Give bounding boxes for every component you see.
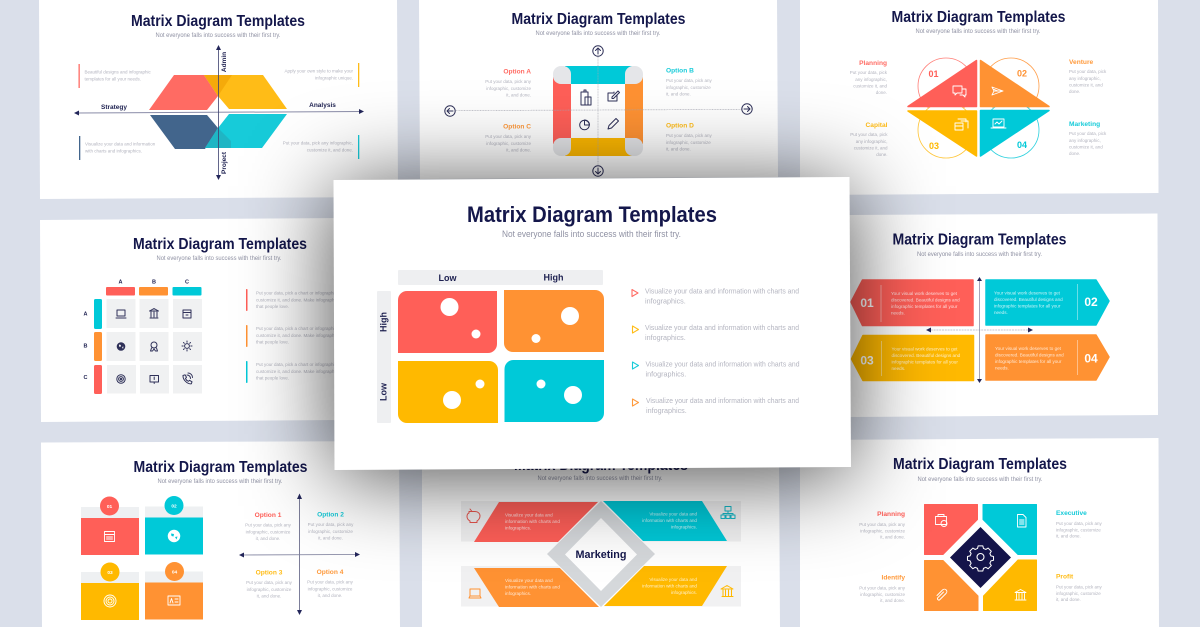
side callouts: customize it, and done. Make infographics <box>256 298 341 302</box>
tag text <box>891 290 1064 371</box>
bullet list: infographics. <box>646 406 687 415</box>
callouts: customize it, and done. <box>307 148 353 152</box>
panel: numbered folder cards <box>41 441 400 627</box>
option labels: Put your data, pick any <box>485 134 532 139</box>
option texts: infographic, customize <box>308 586 353 592</box>
bullet list: infographics. <box>645 296 686 306</box>
option labels: Put your data, pick any <box>666 78 713 83</box>
tag text: Your visual work deserves to get <box>892 346 958 352</box>
side callouts: customize it, and done. Make infographics <box>256 333 341 338</box>
heading: Matrix Diagram Templates <box>467 202 717 227</box>
labels: done. <box>1069 151 1080 156</box>
callouts: Beautiful designs and infographic <box>84 70 152 74</box>
labels: customize it, and <box>854 146 888 150</box>
axis labels: Project <box>221 151 228 174</box>
labels: infographic, customize <box>1056 591 1101 596</box>
side callouts: that people love. <box>256 376 289 380</box>
tag dividers <box>881 284 1078 376</box>
grid cells <box>106 299 202 394</box>
square frame <box>553 66 643 156</box>
folder cards: 01 <box>107 504 112 510</box>
heading: Matrix Diagram Templates <box>514 457 688 474</box>
arrow tags <box>851 280 1109 380</box>
bullet list: Visualize your data and information with charts and <box>645 286 799 296</box>
side callouts <box>246 289 341 383</box>
labels: Planning <box>859 60 887 67</box>
option labels: it, and done. <box>506 92 531 98</box>
labels: Executive <box>1056 510 1087 517</box>
tag numbers: 03 <box>860 354 874 368</box>
option texts <box>245 512 354 598</box>
heading: Matrix Diagram Templates <box>512 11 686 28</box>
subtitle: Not everyone falls into success with their first try. <box>502 229 681 239</box>
labels: Put your data, pick any <box>859 522 906 527</box>
labels <box>859 510 1103 603</box>
tag text: needs. <box>994 310 1008 315</box>
labels: any infographic, <box>1069 138 1101 143</box>
labels: done. <box>876 152 888 157</box>
grid labels: A <box>84 312 88 318</box>
axes with arrows <box>74 45 364 180</box>
option labels <box>485 68 713 152</box>
subtitle: Not everyone falls into success with their first try. <box>536 30 661 37</box>
tag text: discovered. Beautiful designs and <box>892 353 961 358</box>
cross arrows <box>926 277 1033 383</box>
labels: any infographic, <box>855 77 887 82</box>
option labels: Put your data, pick any <box>666 133 713 138</box>
labels: Marketing <box>1069 121 1100 128</box>
option texts: Put your data, pick any <box>308 522 354 527</box>
option labels: Option D <box>666 122 694 130</box>
side callouts: that people love. <box>256 304 289 309</box>
option texts: Option 2 <box>317 512 344 518</box>
folder cards: 04 <box>172 569 177 575</box>
grid labels: C <box>185 280 189 286</box>
callouts: with charts and infographics. <box>85 148 142 154</box>
heading: Matrix Diagram Templates <box>892 232 1066 248</box>
tag numbers: 04 <box>1084 352 1098 366</box>
option texts: it, and done. <box>256 536 280 541</box>
bullet list: Visualize your data and information with charts and <box>646 360 800 368</box>
labels: done. <box>876 90 887 95</box>
numbers: 04 <box>1017 140 1027 150</box>
callouts: infographic unique. <box>315 76 353 80</box>
band text: Visualize your data and <box>505 578 553 583</box>
numbers: 03 <box>929 141 939 151</box>
tag text: Your visual work deserves to get <box>891 291 958 296</box>
band text <box>505 512 697 596</box>
subtitle: Not everyone falls into success with their first try. <box>158 478 283 485</box>
tag text: needs. <box>995 366 1009 370</box>
option texts: Option 4 <box>317 569 344 576</box>
labels: Put your data, pick <box>850 70 888 75</box>
heading: Matrix Diagram Templates <box>134 459 308 476</box>
labels: Put your data, pick any <box>1056 521 1103 526</box>
labels: Identify <box>882 574 905 582</box>
bullet list: infographics. <box>646 370 686 378</box>
row header: Low <box>378 382 388 401</box>
folder cards <box>81 496 203 620</box>
labels: Planning <box>877 511 905 518</box>
option labels: Option B <box>666 68 694 74</box>
panel: three by three icon grid <box>40 218 342 422</box>
grey bands <box>461 501 741 606</box>
panel: options square matrix <box>419 0 778 179</box>
axis labels: Analysis <box>309 102 336 109</box>
diamond <box>546 499 656 609</box>
labels: customize it, and <box>1069 82 1103 88</box>
panel: strategy analysis hexagon matrix <box>39 0 398 199</box>
tag text: discovered. Beautiful designs and <box>994 297 1063 302</box>
parallelograms <box>474 501 727 607</box>
labels: done. <box>1069 89 1080 94</box>
callouts: Visualize your data and information <box>85 142 156 146</box>
option texts: Option 1 <box>255 512 282 519</box>
header and row bars <box>94 287 202 394</box>
tag text: Your visual work deserves to get <box>995 346 1062 351</box>
labels: Put your data, pick <box>1069 131 1107 136</box>
subtitle: Not everyone falls into success with their first try. <box>156 255 282 262</box>
subtitle: Not everyone falls into success with their first try. <box>538 475 663 482</box>
option texts: Put your data, pick any <box>307 580 354 584</box>
option labels: it, and done. <box>666 146 691 152</box>
band text: infographics. <box>505 591 531 596</box>
tag numbers <box>860 295 1098 368</box>
axis labels: Strategy <box>101 104 127 111</box>
quadrant icons <box>936 514 1026 600</box>
tag text: discovered. Beautiful designs and <box>891 298 960 302</box>
band text: information with charts and <box>505 519 560 524</box>
option labels: infographic, customize <box>486 86 531 91</box>
callouts <box>78 63 359 160</box>
labels: it, and done. <box>1056 534 1081 538</box>
labels: Profit <box>1056 574 1074 580</box>
band text: Visualize your data and <box>505 512 553 518</box>
labels: infographic, customize <box>1056 528 1101 532</box>
bullet list: Visualize your data and information with charts and <box>646 396 799 405</box>
column header <box>398 270 603 285</box>
labels <box>850 59 1107 157</box>
grid icons <box>116 308 192 384</box>
column header: High <box>544 272 564 282</box>
bullet list: infographics. <box>645 333 686 342</box>
diamond: Marketing <box>576 549 626 561</box>
arrow buttons <box>445 46 752 176</box>
option texts: it, and done. <box>318 593 342 598</box>
quadrant: low low <box>398 361 498 423</box>
subtitle: Not everyone falls into success with their first try. <box>918 476 1043 483</box>
grid labels: C <box>84 375 88 381</box>
option labels: it, and done. <box>506 148 531 152</box>
folder cards: 02 <box>171 503 177 509</box>
option labels: it, and done. <box>666 92 691 96</box>
band icons <box>467 506 735 598</box>
option texts: it, and done. <box>257 594 281 598</box>
panel: triangle petals matrix <box>800 0 1158 195</box>
labels: any infographic, <box>1069 76 1101 81</box>
dotted axes <box>456 57 742 165</box>
cross arrows <box>239 494 360 615</box>
tag text: discovered. Beautiful designs and <box>995 352 1064 358</box>
option labels: Option C <box>503 124 531 130</box>
row header: High <box>378 312 388 332</box>
gear icon <box>967 546 994 571</box>
tag numbers: 01 <box>860 296 874 310</box>
tag text: Your visual work deserves to get <box>994 290 1061 296</box>
panel: marketing diamond <box>422 457 780 627</box>
grid labels: B <box>152 280 156 286</box>
row header <box>377 291 391 423</box>
quadrants <box>924 504 1036 610</box>
option labels: infographic, customize <box>666 85 711 90</box>
labels: it, and done. <box>1056 597 1081 602</box>
heading: Matrix Diagram Templates <box>893 456 1067 473</box>
petal circles <box>918 58 1039 158</box>
tag text: needs. <box>891 310 905 316</box>
option labels: infographic, customize <box>666 140 711 145</box>
quadrant: high high <box>504 290 604 352</box>
band text: infographics. <box>671 524 697 530</box>
grid labels <box>84 280 189 381</box>
numbers: 01 <box>928 69 939 79</box>
axis labels: Admin <box>221 52 228 72</box>
icons <box>953 86 1006 130</box>
heading: Matrix Diagram Templates <box>892 9 1066 26</box>
heading: Matrix Diagram Templates <box>131 13 305 30</box>
tag text: needs. <box>892 366 905 371</box>
callouts: templates for all your needs. <box>84 76 141 82</box>
option texts: Put your data, pick any <box>246 580 293 585</box>
grid labels: A <box>119 280 123 286</box>
option texts: infographic, customize <box>246 530 291 534</box>
centre diamond <box>950 527 1011 588</box>
labels: infographic, customize <box>860 528 905 534</box>
callouts: Apply your own style to make your <box>284 68 354 74</box>
subtitle: Not everyone falls into success with their first try. <box>156 32 281 39</box>
panel: gear diamond quadrants <box>800 438 1159 627</box>
band text: information with charts and <box>642 518 697 523</box>
panel: central low high matrix <box>334 177 851 470</box>
band text: infographics. <box>671 590 697 595</box>
callouts: Put your data, pick any infographic, <box>283 140 353 146</box>
tag text: infographic templates for all your <box>892 360 958 364</box>
tag text: infographic templates for all your <box>994 304 1061 308</box>
triangles <box>908 60 1049 156</box>
band text: information with charts and <box>642 584 697 588</box>
folder cards: 03 <box>107 570 113 576</box>
labels: it, and done. <box>880 534 905 540</box>
labels: customize it, and <box>853 84 887 88</box>
tag text: infographic templates for all your <box>891 304 958 309</box>
labels: any infographic, <box>856 139 888 144</box>
side callouts: Put your data, pick a chart or infographic, <box>256 362 338 367</box>
labels: it, and done. <box>880 598 905 603</box>
subtitle: Not everyone falls into success with their first try. <box>916 28 1041 35</box>
panel: arrow tags matrix <box>848 214 1158 417</box>
icons <box>580 90 620 130</box>
column header: Low <box>438 273 457 283</box>
labels: Put your data, pick any <box>859 586 906 590</box>
labels: infographic, customize <box>860 592 905 597</box>
labels: Put your data, pick any <box>1056 584 1103 590</box>
band text: infographics. <box>505 526 531 530</box>
bullet list: Visualize your data and information with charts and <box>645 323 799 332</box>
subtitle: Not everyone falls into success with their first try. <box>917 251 1042 258</box>
option texts: infographic, customize <box>308 529 353 534</box>
labels: Put your data, pick <box>850 132 888 137</box>
option texts: it, and done. <box>318 536 343 540</box>
side callouts: Put your data, pick a chart or infographic, <box>256 326 338 331</box>
tag numbers: 02 <box>1084 295 1098 309</box>
side callouts: that people love. <box>256 340 289 344</box>
labels: Put your data, pick <box>1069 69 1107 74</box>
quadrant: high low <box>398 291 497 353</box>
band text: Visualize your data and <box>649 512 697 516</box>
grid labels: B <box>84 344 88 350</box>
option texts: Put your data, pick any <box>245 522 292 528</box>
option labels: Option A <box>503 68 531 76</box>
heading: Matrix Diagram Templates <box>133 236 307 253</box>
option texts: infographic, customize <box>247 587 292 592</box>
quadrant: low high <box>504 360 604 422</box>
band text: information with charts and <box>505 584 560 590</box>
tag text: infographic templates for all your <box>995 359 1062 364</box>
side callouts: customize it, and done. Make infographics <box>256 369 341 374</box>
labels: customize it, and <box>1069 144 1103 150</box>
numbers <box>928 68 1027 151</box>
option texts: Option 3 <box>256 570 283 576</box>
hexagon quadrants <box>149 75 287 149</box>
option labels: infographic, customize <box>486 141 531 146</box>
bullet list <box>632 286 800 415</box>
axis labels <box>101 52 336 174</box>
labels: Venture <box>1069 59 1094 66</box>
option labels: Put your data, pick any <box>485 79 532 84</box>
card icons <box>104 530 180 607</box>
labels: Capital <box>866 122 888 129</box>
side callouts: Put your data, pick a chart or infographic, <box>256 290 338 296</box>
numbers: 02 <box>1017 68 1027 78</box>
band text: Visualize your data and <box>649 577 697 582</box>
